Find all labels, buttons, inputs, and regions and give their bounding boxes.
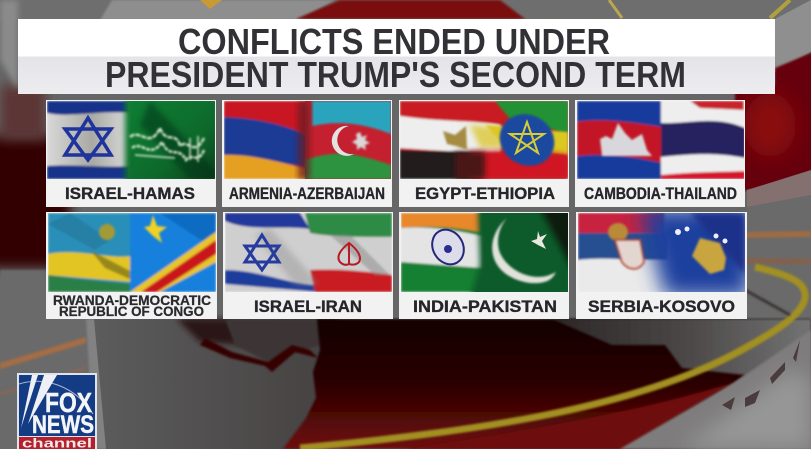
Kosovo stars bbox=[675, 226, 728, 244]
flags: India and Pakistan bbox=[401, 213, 568, 292]
crescent and star bbox=[332, 126, 354, 156]
card: Serbia-Kosovo bbox=[576, 208, 750, 319]
label, two lines bbox=[53, 293, 211, 319]
flags: Rwanda and DR Congo bbox=[48, 213, 216, 292]
Fox News Channel logo bbox=[17, 373, 97, 449]
FOX text: FOX bbox=[45, 387, 92, 418]
flags: Egypt and Ethiopia bbox=[400, 101, 568, 179]
label: EGYPT-ETHIOPIA bbox=[415, 185, 555, 203]
Star of David bbox=[65, 118, 111, 160]
star bbox=[531, 231, 547, 249]
label: ISRAEL-HAMAS bbox=[65, 185, 195, 203]
Rwanda sun bbox=[99, 224, 115, 240]
Iran emblem bbox=[338, 243, 360, 265]
label: ARMENIA-AZERBAIJAN bbox=[229, 185, 385, 203]
Hamas calligraphy bbox=[130, 128, 204, 162]
card: India-Pakistan bbox=[399, 208, 573, 319]
card: Cambodia-Thailand bbox=[575, 100, 745, 207]
Egyptian eagle bbox=[443, 126, 467, 150]
title line 2: PRESIDENT TRUMP'S SECOND TERM bbox=[105, 54, 686, 95]
flags: Cambodia and Thailand bbox=[577, 101, 745, 179]
DRC star bbox=[144, 215, 167, 243]
flags: Israel and Iran bbox=[225, 213, 392, 292]
Ashoka chakra bbox=[431, 228, 465, 266]
card: Israel-Hamas bbox=[46, 96, 220, 207]
label: INDIA-PAKISTAN bbox=[413, 298, 557, 316]
flags: Armenia and Azerbaijan bbox=[224, 101, 391, 179]
map: continents bbox=[94, 319, 811, 449]
crescent bbox=[492, 218, 556, 283]
label, two lines: RWANDA-DEMOCRATIC bbox=[53, 293, 211, 308]
channel strip bbox=[19, 437, 95, 449]
card: Rwanda-DRC bbox=[46, 212, 217, 319]
label, two lines: REPUBLIC OF CONGO bbox=[59, 304, 204, 319]
logo searchlights bbox=[19, 375, 93, 428]
card: Israel-Iran bbox=[223, 212, 393, 319]
card: Armenia-Azerbaijan bbox=[222, 100, 392, 207]
Kosovo map bbox=[692, 238, 726, 274]
label: SERBIA-KOSOVO bbox=[588, 298, 735, 316]
label: ISRAEL-IRAN bbox=[254, 298, 362, 316]
flags: Israel and Hamas bbox=[47, 101, 215, 179]
label: CAMBODIA-THAILAND bbox=[584, 185, 737, 203]
card: Egypt-Ethiopia bbox=[399, 100, 569, 207]
NEWS text: NEWS bbox=[32, 411, 94, 439]
Ethiopian emblem bbox=[498, 112, 556, 168]
gold ring bbox=[300, 267, 805, 448]
title banner bbox=[18, 19, 775, 95]
flags: Serbia and Kosovo bbox=[578, 213, 745, 292]
Star of David bbox=[245, 235, 279, 270]
title line 1: CONFLICTS ENDED UNDER bbox=[178, 21, 610, 62]
Serbian coat of arms bbox=[608, 223, 644, 269]
Angkor Wat emblem bbox=[600, 123, 652, 156]
